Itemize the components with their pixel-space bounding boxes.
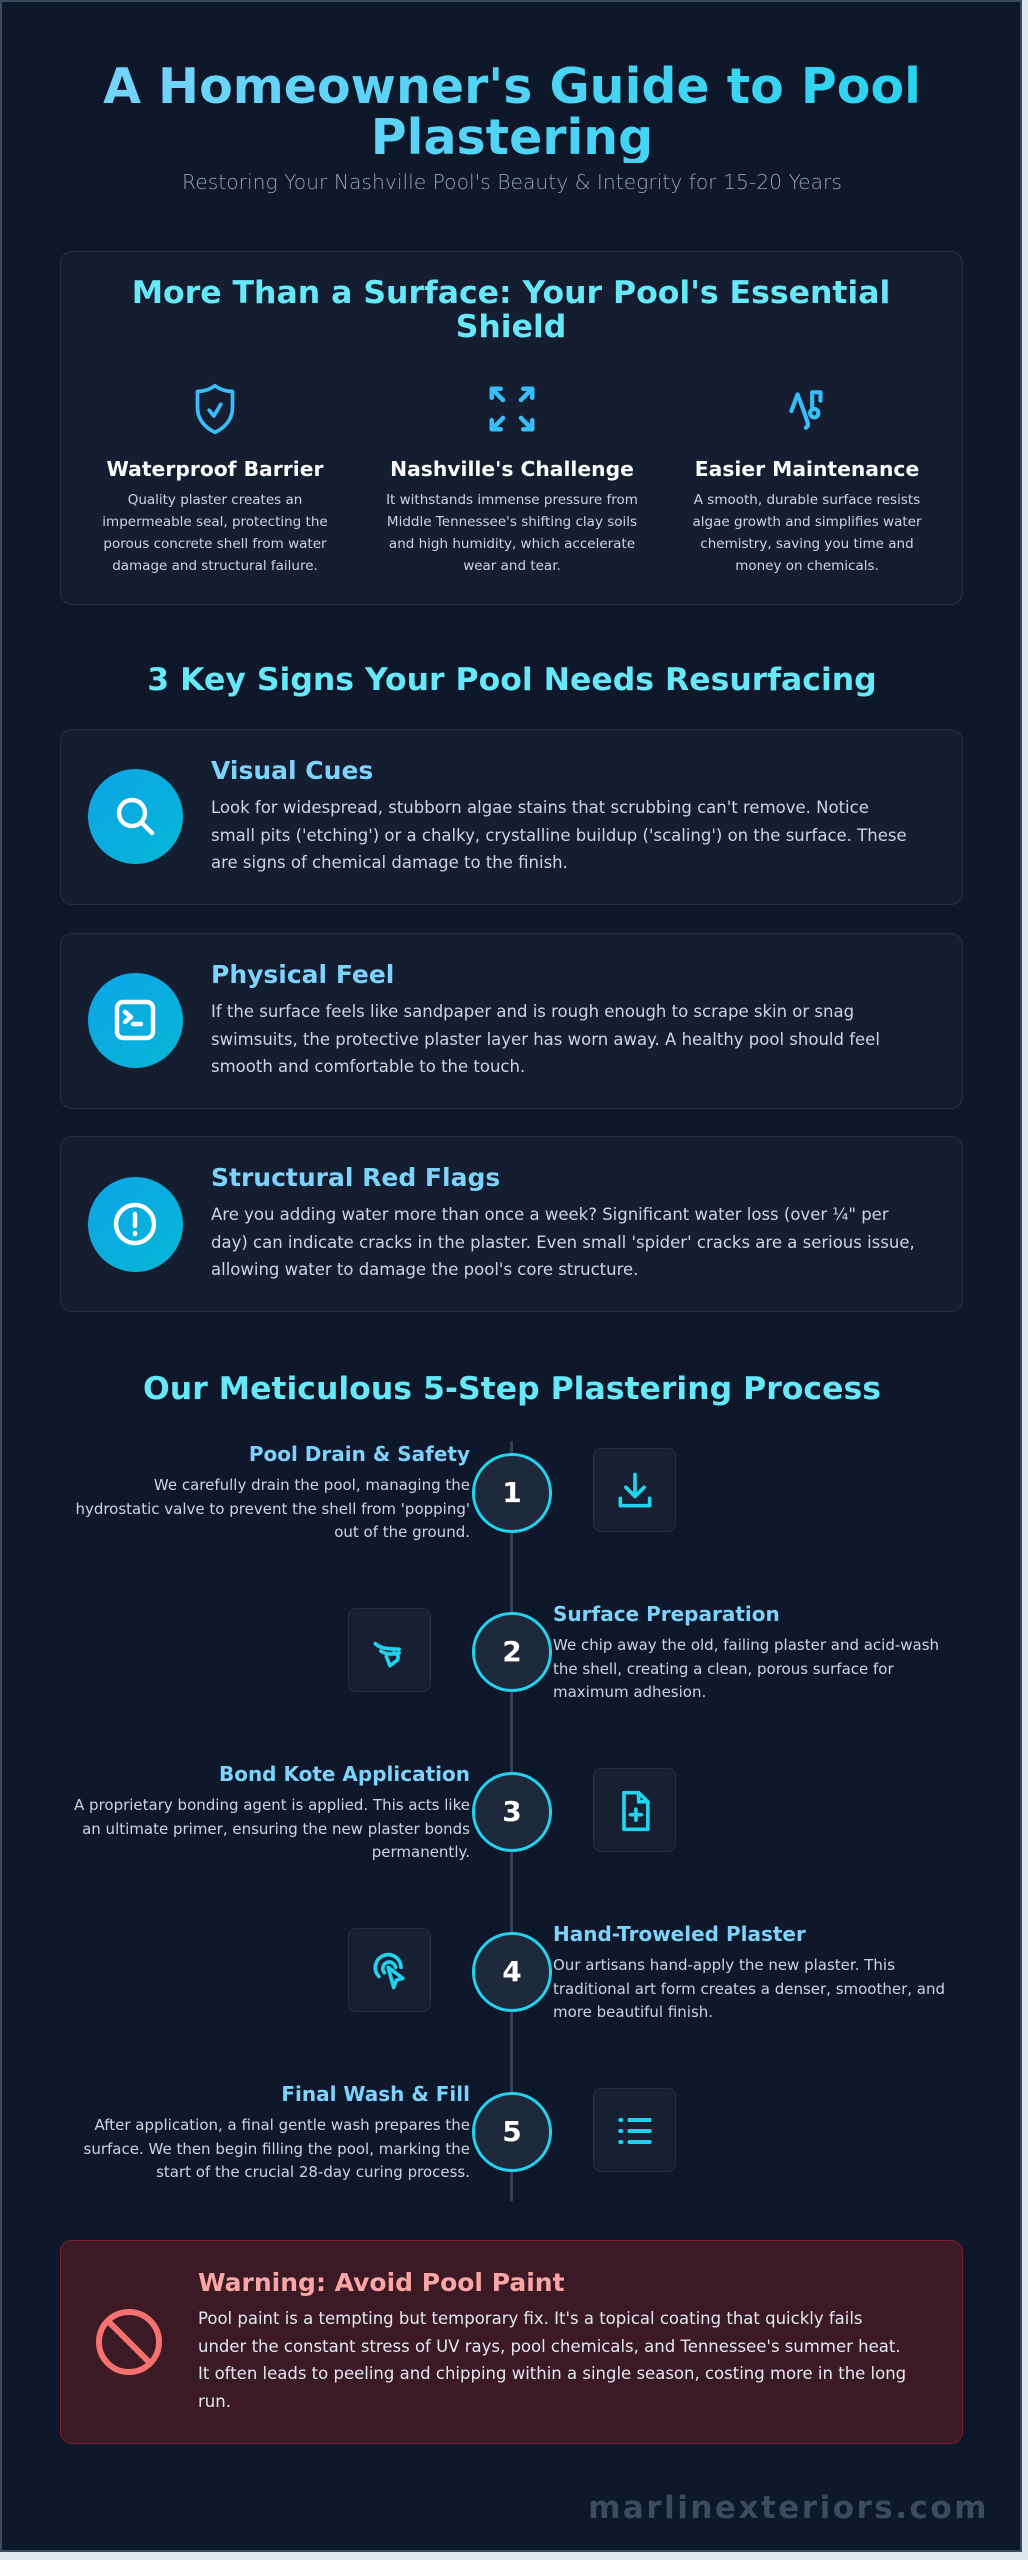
title (12, 61, 1012, 163)
title: Nashville's Challenge (390, 457, 634, 481)
description (386, 492, 638, 574)
description (102, 492, 328, 574)
icon: terminal (88, 973, 183, 1068)
card title: Structural Red Flags (211, 1163, 500, 1192)
step text: start of the crucial 28-day curing process. (156, 2163, 470, 2181)
step text (553, 1956, 945, 2021)
feature: waterproof barrier (102, 384, 328, 574)
number 1: 1 (502, 1476, 522, 1509)
step 4 (553, 1922, 945, 2021)
step text: traditional art form creates a denser, smoother, and (553, 1980, 945, 1998)
heading: more than a surface: More Than a Surface: Your Pool's Essential (132, 275, 890, 311)
card text (211, 798, 907, 872)
step title: Hand-Troweled Plaster (553, 1922, 806, 1946)
number 4: 4 (502, 1955, 522, 1988)
step text: After application, a final gentle wash prepares the (94, 2116, 470, 2134)
number 1 (472, 1453, 552, 1533)
step text: maximum adhesion. (553, 1683, 706, 1701)
card text: Are you adding water more than once a week? Significant water loss (over ¼" per (211, 1205, 889, 1224)
description: A smooth, durable surface resists (694, 492, 920, 508)
card text: swimsuits, the protective plaster layer has worn away. A healthy pool should feel (211, 1030, 880, 1048)
icon: alert (88, 1177, 183, 1272)
step title: Surface Preparation (553, 1602, 780, 1626)
feature: nashville's challenge (386, 386, 638, 574)
icon: tools (789, 390, 823, 430)
icon: magnifier (88, 769, 183, 864)
description: wear and tear. (463, 558, 561, 574)
step text: out of the ground. (334, 1523, 470, 1541)
step text: surface. We then begin filling the pool, marking the (84, 2140, 470, 2158)
number 2: 2 (502, 1635, 522, 1668)
warning text: under the constant stress of UV rays, pool chemicals, and Tennessee's summer heat. (198, 2337, 901, 2356)
step 3 (74, 1762, 470, 1861)
step text: the shell, creating a clean, porous surface for (553, 1660, 894, 1678)
step text: We chip away the old, failing plaster and acid-wash (553, 1636, 939, 1654)
card text: small pits ('etching') or a chalky, crystalline buildup ('scaling') on the surface. These (211, 826, 907, 844)
description: damage and structural failure. (112, 558, 318, 574)
title: Waterproof Barrier (107, 457, 323, 481)
step text: an ultimate primer, ensuring the new plaster bonds (82, 1820, 470, 1838)
number 5: 5 (502, 2115, 522, 2148)
description: chemistry, saving you time and (700, 536, 914, 552)
number 2 (472, 1612, 552, 1692)
description: porous concrete shell from water (103, 536, 327, 552)
title: A Homeowner's Guide to Pool (103, 58, 921, 115)
feature: easier maintenance (692, 390, 922, 574)
icon: file plus (593, 1768, 676, 1852)
description: It withstands immense pressure from (386, 492, 638, 508)
title: Easier Maintenance (695, 457, 919, 481)
description: algae growth and simplifies water (692, 514, 922, 530)
card text: allowing water to damage the pool's core structure. (211, 1260, 638, 1279)
step text (84, 2116, 470, 2181)
card: structural red flags (60, 1136, 963, 1312)
card text: If the surface feels like sandpaper and is rough enough to scrape skin or snag (211, 1002, 854, 1021)
description: money on chemicals. (735, 558, 879, 574)
panel: essential shield (60, 251, 963, 605)
warning text: run. (198, 2392, 231, 2411)
warning text: It often leads to peeling and chipping within a single season, costing more in the long (198, 2364, 906, 2383)
step 1 (75, 1442, 470, 1541)
heading: 3 key signs: 3 Key Signs Your Pool Needs Resurfacing (147, 662, 877, 698)
card text: Look for widespread, stubborn algae stains that scrubbing can't remove. Notice (211, 798, 869, 817)
step text: more beautiful finish. (553, 2003, 713, 2021)
heading: more than a surface: Shield (456, 309, 566, 345)
card text (211, 1205, 915, 1279)
warning text: Pool paint is a tempting but temporary fix. It's a topical coating that quickly fails (198, 2309, 863, 2328)
warning title: Warning: Avoid Pool Paint (198, 2268, 565, 2297)
description: and high humidity, which accelerate (389, 536, 635, 552)
step text: Our artisans hand-apply the new plaster. This (553, 1956, 895, 1974)
number 3: 3 (502, 1795, 522, 1828)
card: visual cues (60, 729, 963, 905)
card text: smooth and comfortable to the touch. (211, 1057, 525, 1076)
description: Middle Tennessee's shifting clay soils (387, 514, 637, 530)
step title: Final Wash & Fill (281, 2082, 470, 2106)
icon: pointer rings (348, 1928, 431, 2012)
card: physical feel (60, 933, 963, 1109)
timeline line (510, 1441, 513, 2201)
step title: Pool Drain & Safety (249, 1442, 470, 1466)
icon: download (593, 1448, 676, 1532)
step text (75, 1476, 470, 1541)
footer: brand: marlinexteriors.com (588, 2490, 989, 2526)
step text: A proprietary bonding agent is applied. This acts like (74, 1796, 470, 1814)
step 2 (553, 1602, 939, 1701)
step text: permanently. (372, 1843, 470, 1861)
step title: Bond Kote Application (219, 1762, 470, 1786)
card text (211, 1002, 880, 1076)
number 4 (472, 1932, 552, 2012)
warning text (198, 2309, 906, 2411)
icon: pressure arrows (490, 386, 534, 432)
step text: We carefully drain the pool, managing the (154, 1476, 470, 1494)
number 5 (472, 2092, 552, 2172)
icon: shield (196, 384, 234, 434)
title: Plastering (371, 109, 653, 166)
callout: warning (60, 2240, 963, 2444)
heading: more than a surface (132, 275, 890, 345)
icon: list (593, 2088, 676, 2172)
icon: wind (348, 1608, 431, 1692)
card text: day) can indicate cracks in the plaster. Even small 'spider' cracks are a serious issue, (211, 1232, 915, 1252)
description: impermeable seal, protecting the (102, 514, 328, 530)
description: Quality plaster creates an (128, 492, 302, 508)
step 5 (84, 2082, 470, 2181)
icon: prohibited (96, 2309, 162, 2375)
subtitle: Restoring Your Nashville Pool's Beauty & Integrity for 15-20 Years (182, 170, 842, 194)
heading: 5-step process: Our Meticulous 5-Step Plastering Process (143, 1371, 881, 1407)
card title: Physical Feel (211, 960, 394, 989)
card title: Visual Cues (211, 756, 373, 785)
card text: are signs of chemical damage to the finish. (211, 853, 568, 872)
description (692, 492, 922, 574)
step text (553, 1636, 939, 1701)
number 3 (472, 1772, 552, 1852)
step text: hydrostatic valve to prevent the shell from 'popping' (75, 1500, 470, 1518)
step text (74, 1796, 470, 1861)
